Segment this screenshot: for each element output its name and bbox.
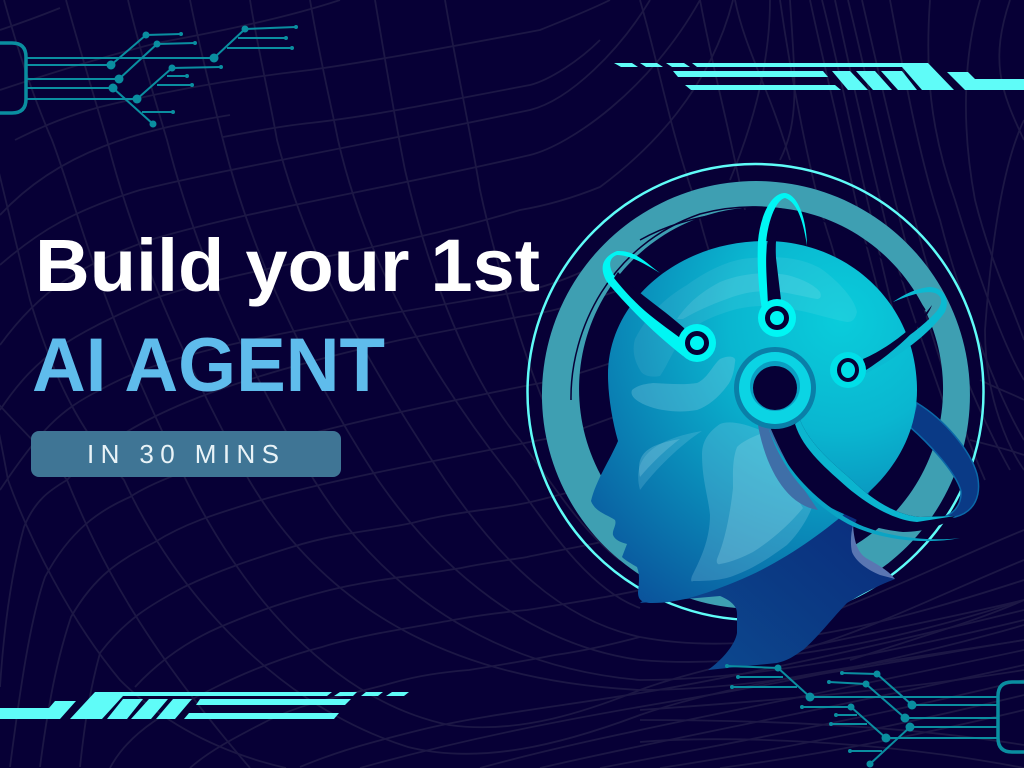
lower orbit shadow — [758, 425, 818, 510]
neck — [640, 491, 895, 670]
lower orbit cyan strip — [795, 420, 955, 522]
dense top right verticals — [640, 0, 760, 360]
title: Build your 1st: Build your 1st — [35, 224, 540, 307]
right antenna — [830, 287, 947, 388]
rising curves — [0, 8, 60, 30]
neck strip — [851, 525, 895, 579]
outer thin ring — [528, 164, 984, 620]
decoration: bottom-left tech stripes — [0, 692, 409, 719]
subtitle: AI AGENT: AI AGENT — [32, 323, 385, 408]
lower orbit thin tail — [768, 427, 960, 541]
decoration: top-right tech stripes — [614, 63, 1024, 90]
centre ring — [734, 347, 816, 429]
illustration: AI head with ring — [528, 164, 984, 670]
head and face — [591, 241, 917, 603]
decoration: bottom-right circuit — [725, 664, 1024, 768]
head highlights — [632, 257, 857, 581]
blue orbit back band — [910, 403, 979, 518]
thin scratch arcs — [571, 207, 925, 400]
badge: in 30 mins — [31, 431, 341, 477]
teal ring — [542, 181, 970, 609]
lower orbit dark arm — [770, 420, 955, 532]
badge: in 30 mins: IN 30 MINS — [87, 439, 279, 469]
left antenna — [603, 251, 716, 362]
top antenna — [758, 193, 807, 337]
decoration: top-left circuit — [0, 25, 298, 128]
